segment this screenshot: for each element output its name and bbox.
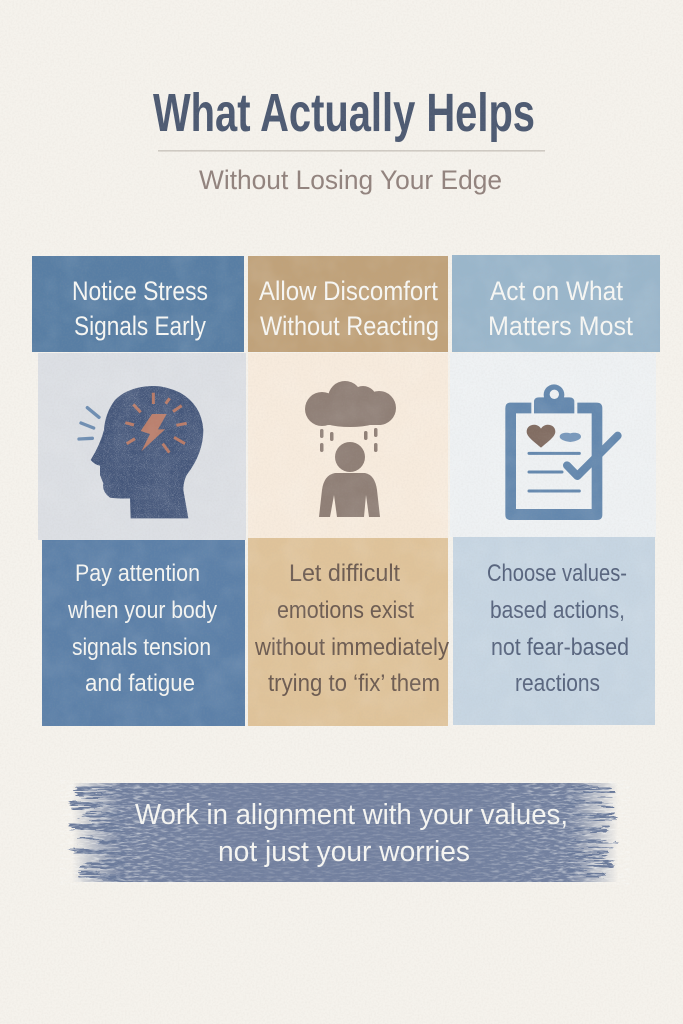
panel: notice stress signals early bbox=[32, 256, 246, 726]
body: choose values-based actions: not fear-based bbox=[491, 634, 629, 661]
banner text: not just your worries bbox=[218, 836, 470, 868]
banner text: Work in alignment with your values, bbox=[135, 799, 568, 831]
body: let difficult emotions exist: without immediately bbox=[254, 634, 449, 661]
icon: head with lightning bolt bbox=[79, 383, 207, 520]
body: pay attention: signals tension bbox=[72, 634, 211, 661]
banner: brush stroke callout bbox=[60, 780, 630, 885]
body: pay attention bbox=[42, 540, 245, 726]
subtitle: Without Losing Your Edge bbox=[199, 165, 502, 195]
header: act on what matters: Matters Most bbox=[488, 311, 633, 341]
body: pay attention: and fatigue bbox=[85, 670, 195, 697]
panel: allow discomfort without reacting bbox=[248, 256, 449, 726]
banner text bbox=[135, 799, 568, 868]
title: What Actually Helps bbox=[153, 83, 535, 143]
header: allow discomfort bbox=[248, 256, 448, 352]
icon: person under rain cloud bbox=[305, 381, 396, 517]
body: let difficult emotions exist: trying to ‘fix’ them bbox=[268, 670, 440, 697]
header: allow discomfort: Without Reacting bbox=[260, 311, 439, 341]
body: choose values-based actions bbox=[453, 537, 655, 725]
body: pay attention: when your body bbox=[67, 597, 217, 624]
panel: act on what matters most bbox=[450, 255, 660, 725]
body: pay attention: Pay attention bbox=[75, 560, 200, 587]
body: choose values-based actions: Choose values- bbox=[487, 560, 627, 587]
header: notice stress: Notice Stress bbox=[72, 276, 208, 306]
icon: clipboard with heart and check bbox=[505, 384, 618, 520]
header: act on what matters bbox=[452, 255, 660, 352]
header: notice stress bbox=[32, 256, 244, 352]
header: allow discomfort: Allow Discomfort bbox=[259, 276, 438, 306]
body: let difficult emotions exist: emotions exist bbox=[277, 597, 414, 624]
header: notice stress: Signals Early bbox=[74, 311, 206, 341]
body: choose values-based actions: based actions, bbox=[490, 597, 625, 624]
header: act on what matters: Act on What bbox=[490, 276, 623, 306]
body: let difficult emotions exist bbox=[248, 538, 449, 726]
body: choose values-based actions: reactions bbox=[515, 670, 600, 697]
body: let difficult emotions exist: Let difficult bbox=[289, 560, 400, 587]
